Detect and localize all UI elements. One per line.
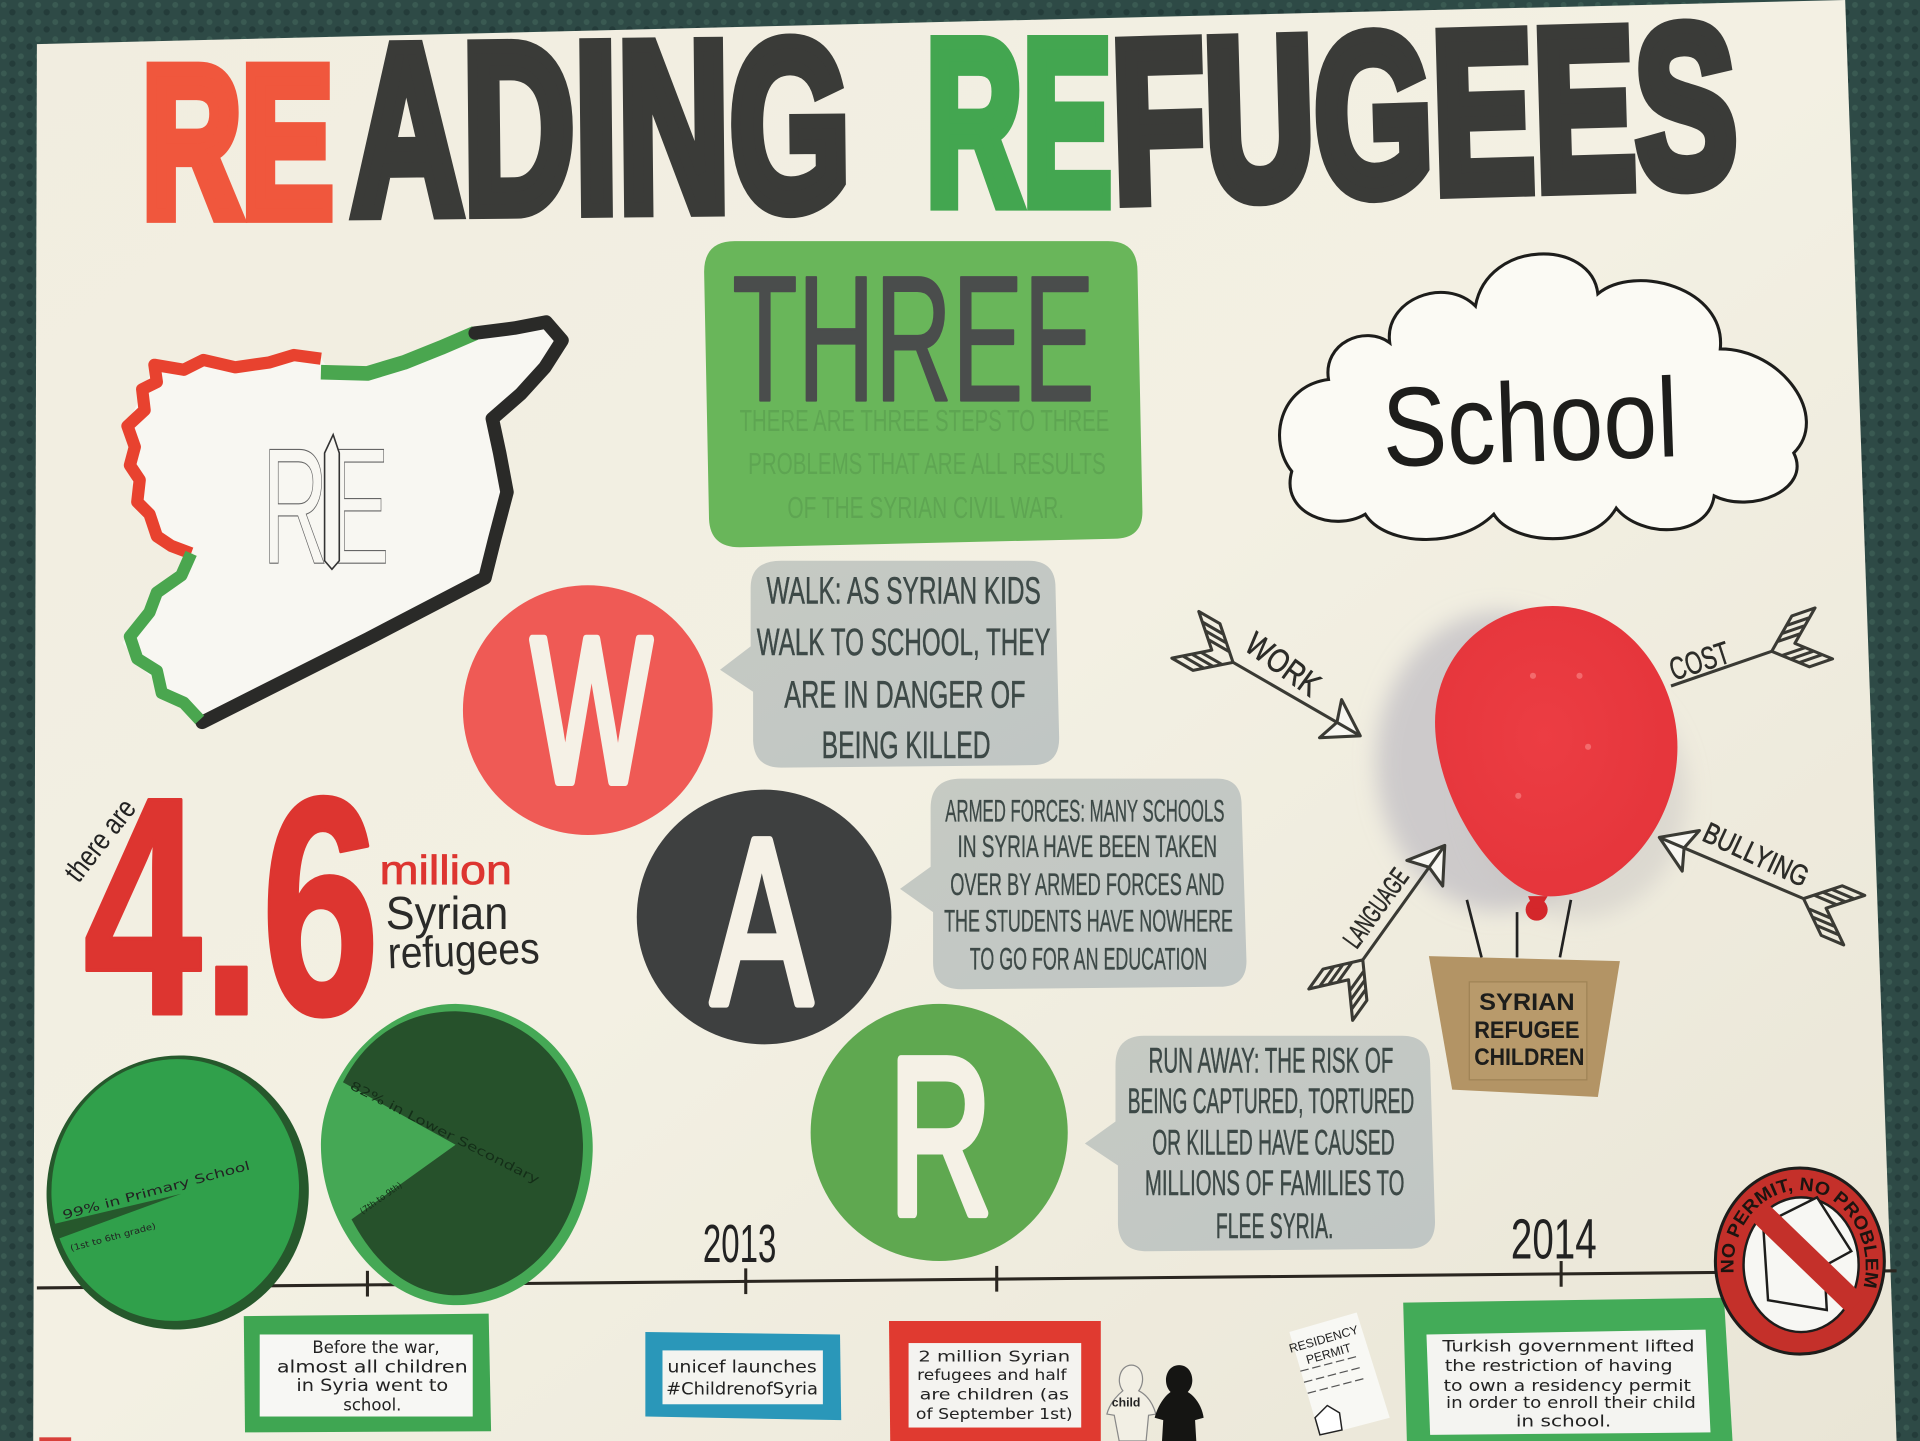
there are: there are [58, 793, 143, 888]
timeline card: 2 million [889, 1321, 1101, 1441]
circle W: W [531, 595, 651, 825]
cloud: School: School [1380, 354, 1681, 490]
panel: three intro box [704, 238, 1142, 547]
timeline card: Turkish government: Turkish government lifted [1441, 1337, 1695, 1356]
heading: THREE: THREE [732, 238, 1095, 438]
intro text: PROBLEMS THAT ARE ALL RESULTS [748, 447, 1106, 481]
basket: Syrian refugee children: CHILDREN [1474, 1044, 1584, 1071]
sign text: NO PERMIT, NO PROBLEM [1720, 1178, 1878, 1288]
balloon [1435, 606, 1677, 921]
arrow: language [1309, 830, 1467, 1020]
timeline card: Turkish government: in school. [1516, 1411, 1611, 1430]
refugees: refugees [387, 924, 540, 978]
circle R: R [889, 1012, 992, 1261]
intro text: THERE ARE THREE STEPS TO THREE [740, 404, 1109, 438]
pie chart: lower secondary [321, 1004, 593, 1305]
pie sublabel: (7th to 9th) [359, 1181, 404, 1217]
arrow: work [1172, 611, 1374, 759]
timeline card: before the war: Before the war, [312, 1338, 440, 1357]
red fragment at bottom edge [39, 1437, 71, 1441]
icon: child figure [1107, 1365, 1156, 1441]
icon: adult figure [1155, 1365, 1204, 1441]
basket: Syrian refugee children: SYRIAN [1479, 989, 1575, 1016]
timeline card: unicef [645, 1332, 841, 1420]
speech bubble: run away: BEING CAPTURED, TORTURED [1128, 1081, 1414, 1121]
arrow: bullying: BULLYING [1698, 816, 1814, 894]
intro text: OF THE SYRIAN CIVIL WAR. [787, 491, 1064, 525]
title [142, 0, 1740, 264]
icon: child figure: child [1112, 1396, 1140, 1410]
map label RE with pencil: RE [262, 414, 389, 599]
speech bubble: walk: WALK TO SCHOOL, THEY [757, 622, 1051, 664]
year 2014: 2014 [1511, 1208, 1597, 1271]
speech bubble: armed forces: IN SYRIA HAVE BEEN TAKEN [958, 828, 1217, 864]
pie chart: primary school [29, 1038, 326, 1346]
timeline card: Turkish government: the restriction of having [1445, 1356, 1673, 1375]
speech bubble: armed forces [900, 779, 1246, 989]
cloud: School [1280, 254, 1806, 540]
circle R [811, 1004, 1068, 1261]
million: million [380, 847, 512, 893]
speech bubble: walk [720, 561, 1059, 768]
speech bubble: run away: OR KILLED HAVE CAUSED [1152, 1123, 1395, 1163]
icon: residency permit: PERMIT [1304, 1341, 1353, 1367]
house outline [1763, 1197, 1851, 1310]
pie label: 99% in Primary School [61, 1159, 251, 1222]
balloon shadow [1376, 612, 1687, 918]
timeline card: Turkish government: to own a residency permit [1444, 1376, 1691, 1395]
Syrian: Syrian [386, 887, 508, 939]
timeline card: 2 million: are children (as [920, 1385, 1069, 1403]
balloon strings [1467, 900, 1571, 957]
map label RE with pencil [262, 414, 389, 599]
basket: Syrian refugee children: REFUGEE [1474, 1017, 1579, 1044]
circle A [637, 790, 891, 1053]
year 2013: 2013 [703, 1214, 776, 1274]
timeline card: Turkish government [1403, 1298, 1733, 1441]
arrow: cost [1662, 608, 1833, 711]
timeline card: before the war: in Syria went to [296, 1376, 448, 1395]
timeline card: 2 million: 2 million Syrian [918, 1347, 1070, 1365]
timeline card: before the war: almost all children [277, 1357, 468, 1376]
arrow: language: LANGUAGE [1337, 863, 1415, 954]
circle A: A [711, 790, 812, 1053]
stat: 4.6 million Syrian refugees: 4.6 [83, 732, 380, 1080]
intro text [740, 404, 1109, 525]
basket: Syrian refugee children [1429, 956, 1620, 1097]
speech bubble: armed forces: THE STUDENTS HAVE NOWHERE [944, 903, 1233, 939]
speech bubble: walk: ARE IN DANGER OF [784, 675, 1025, 717]
timeline card: before the war: school. [343, 1395, 401, 1414]
timeline card: before the war [244, 1314, 491, 1432]
timeline [37, 1261, 1897, 1297]
speech bubble: walk: BEING KILLED [822, 725, 991, 767]
speech bubble: run away: FLEE SYRIA. [1216, 1206, 1333, 1246]
arrow: bullying [1649, 813, 1865, 945]
icon: residency permit [1287, 1312, 1390, 1436]
circle W [463, 585, 713, 835]
speech bubble: run away [1085, 1036, 1435, 1251]
map of Syria [123, 321, 566, 722]
pie label: 82% in Lower Secondary [348, 1079, 542, 1187]
speech bubble: run away: MILLIONS OF FAMILIES TO [1145, 1163, 1404, 1203]
arrow: cost: COST [1665, 634, 1734, 687]
speech bubble: run away: RUN AWAY: THE RISK OF [1149, 1040, 1393, 1080]
arrow: work: WORK [1238, 625, 1327, 704]
icon: no permit, no problem sign [1714, 1166, 1886, 1356]
speech bubble: armed forces: OVER BY ARMED FORCES AND [950, 866, 1224, 902]
timeline card: 2 million: refugees and half [917, 1366, 1067, 1384]
speech bubble: walk: WALK: AS SYRIAN KIDS [767, 571, 1041, 613]
title word part: RE red: RE [142, 23, 333, 261]
timeline card: unicef: #ChildrenofSyria [666, 1379, 818, 1399]
speech bubble: armed forces: ARMED FORCES: MANY SCHOOLS [945, 793, 1224, 829]
timeline card: unicef: unicef launches [667, 1357, 817, 1377]
timeline card: 2 million: of September 1st) [916, 1405, 1073, 1423]
icon: residency permit: RESIDENCY [1287, 1323, 1360, 1356]
timeline card: Turkish government: in order to enroll their child [1446, 1393, 1696, 1412]
pie sublabel: (1st to 6th grade) [69, 1222, 157, 1254]
speech bubble: armed forces: TO GO FOR AN EDUCATION [970, 941, 1207, 977]
